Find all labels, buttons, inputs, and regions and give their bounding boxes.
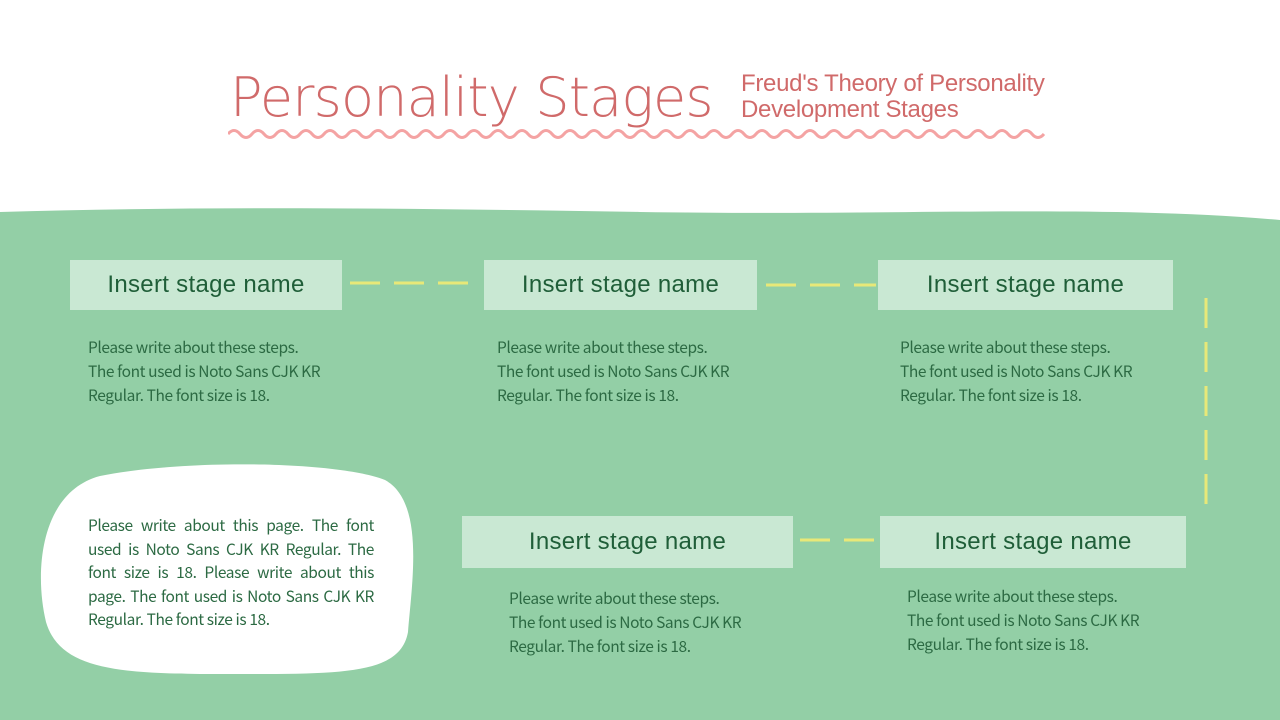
stage 2 [484,260,757,406]
stage 4 text: Please write about these steps. [509,587,719,609]
stage 5 [880,516,1186,655]
stage 5 text [907,585,1139,655]
stage 1 text: Regular. The font size is 18. [88,384,270,406]
stage 1 label: Insert stage name [107,271,305,298]
title: Personality Stages [230,66,713,129]
subtitle: Development Stages [741,96,958,123]
stage 2 label [484,260,757,310]
stage 3 text [900,336,1132,406]
stage 5 text: Please write about these steps. [907,585,1117,607]
stage 4 [462,516,793,657]
stage 2 text: Please write about these steps. [497,336,707,358]
white blob callout [40,464,414,674]
stage 1 text: The font used is Noto Sans CJK KR [88,360,320,382]
stage 1 [70,260,342,406]
stage 3 text: Please write about these steps. [900,336,1110,358]
stage 4 text: Regular. The font size is 18. [509,635,691,657]
stage 4 text: The font used is Noto Sans CJK KR [509,611,741,633]
stage 2 text: The font used is Noto Sans CJK KR [497,360,729,382]
subtitle: Freud's Theory of Personality [741,70,1045,97]
stage 2 label: Insert stage name [522,271,719,298]
stage 4 label [462,516,793,568]
stage 5 text: The font used is Noto Sans CJK KR [907,609,1139,631]
stage 1 label [70,260,342,310]
stage 1 text [88,336,320,406]
stage 3 label: Insert stage name [927,271,1124,298]
callout text: Please write about this page. The font used is Noto Sans CJK KR Regular. The font size is 18. Please write about this page. The font used is Noto Sans CJK KR Regular. The font size is 18. [88,514,374,630]
stage 1 text: Please write about these steps. [88,336,298,358]
subtitle [741,70,1045,123]
stage 2 text: Regular. The font size is 18. [497,384,679,406]
wavy underline [228,129,1045,139]
stage 5 label [880,516,1186,568]
stage 3 [878,260,1173,406]
stage 3 text: Regular. The font size is 18. [900,384,1082,406]
stage 5 label: Insert stage name [934,528,1132,555]
stage 5 text: Regular. The font size is 18. [907,633,1089,655]
stage 2 text [497,336,729,406]
stage 4 text [509,587,741,657]
stage 3 text: The font used is Noto Sans CJK KR [900,360,1132,382]
stage 3 label [878,260,1173,310]
stage 4 label: Insert stage name [529,528,726,555]
